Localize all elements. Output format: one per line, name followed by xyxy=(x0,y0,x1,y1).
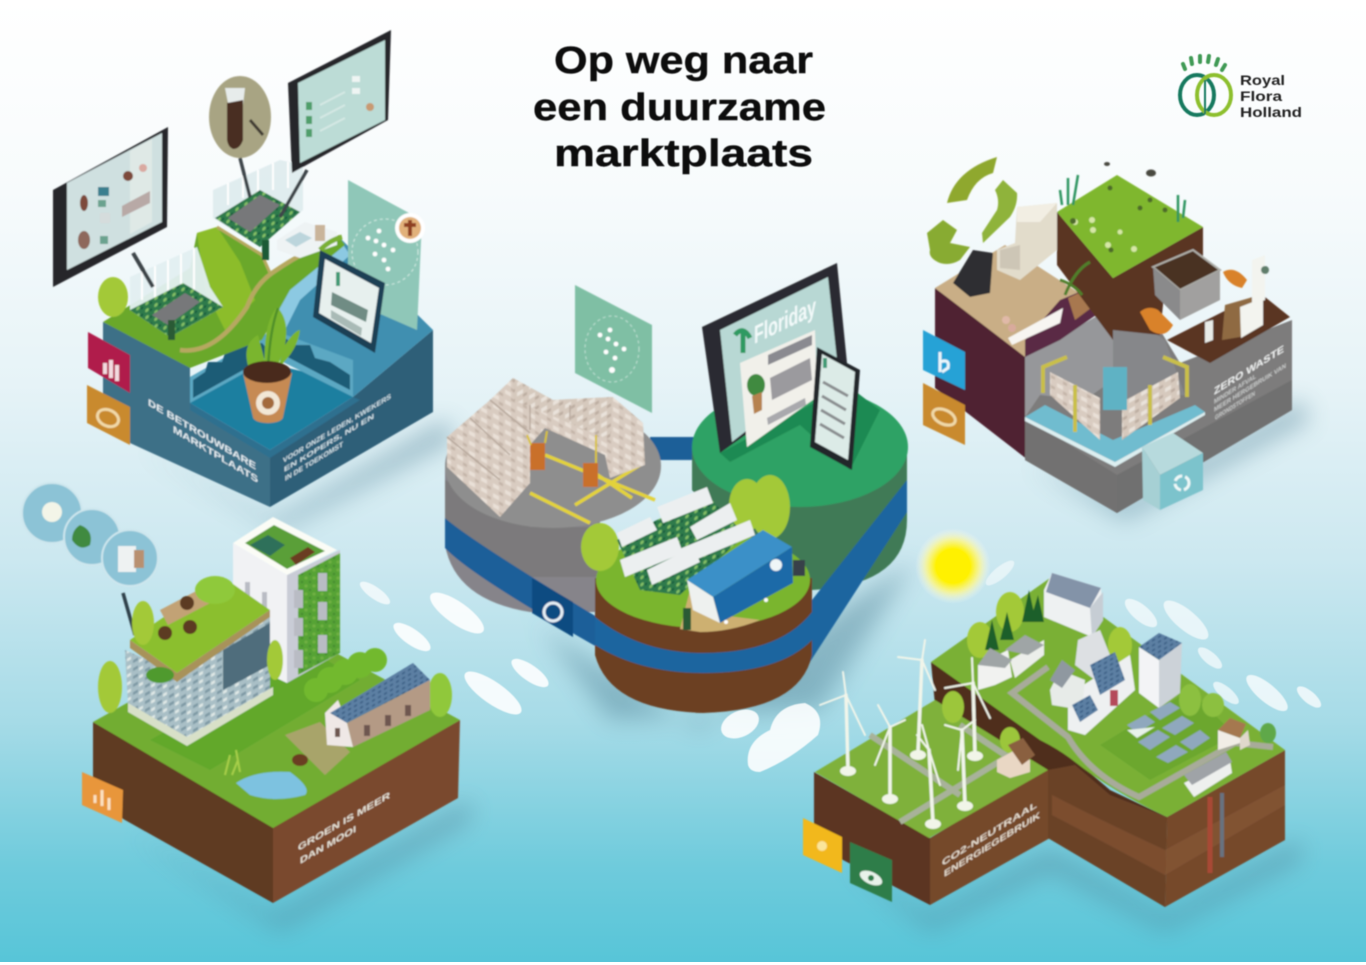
label co2-neutraal energiegebruik: CO2-NEUTRAAL xyxy=(942,800,1037,869)
tree xyxy=(98,277,128,317)
tan top and purple ledge xyxy=(935,245,1125,357)
tree and hedge xyxy=(98,640,452,717)
greenhouses xyxy=(617,487,755,595)
greenhouse back xyxy=(213,160,303,260)
house and pump station xyxy=(1184,718,1250,873)
label right face: VOOR ONZE LEDEN, KWEKERS xyxy=(283,392,391,465)
magnifier soil sample xyxy=(209,76,271,197)
logo: Royal Flora Holland: Royal xyxy=(1240,72,1285,88)
SDG badge red xyxy=(88,332,130,393)
brown floor and chairs xyxy=(1140,255,1290,363)
soft block shadows xyxy=(125,400,1310,930)
label co2-neutraal energiegebruik xyxy=(942,800,1040,880)
logo: Royal Flora Holland: Flora xyxy=(1240,88,1282,104)
label left face xyxy=(148,398,258,486)
tablet Floriday xyxy=(702,263,847,453)
sun xyxy=(915,528,991,604)
ground block xyxy=(93,620,460,903)
label right face: EN KOPERS, NU EN xyxy=(284,412,374,474)
blue band left xyxy=(445,518,597,647)
bees xyxy=(1104,162,1156,176)
bubbles xyxy=(22,483,158,635)
room: water surface and cut-out xyxy=(190,238,433,458)
houses row xyxy=(978,635,1044,690)
label groen is meer dan mooi: DAN MOOI xyxy=(300,824,356,867)
blue connector back xyxy=(650,437,700,460)
solar field xyxy=(1127,702,1210,763)
label zero waste xyxy=(1214,343,1286,422)
plant pot xyxy=(243,307,300,423)
SDG badge green xyxy=(850,842,892,902)
label co2-neutraal energiegebruik: ENERGIEGEBRUIK xyxy=(944,810,1040,880)
SDG badge orange xyxy=(87,385,130,445)
label groen is meer dan mooi xyxy=(298,790,390,867)
tablet on water xyxy=(313,250,385,353)
label left face: DE BETROUWBARE xyxy=(148,398,256,473)
label right face: IN DE TOEKOMST xyxy=(285,440,343,483)
logo: Royal Flora Holland: Holland xyxy=(1240,104,1302,120)
lower plateau xyxy=(815,700,1048,838)
greenhouse left xyxy=(130,247,223,340)
recycling arrows xyxy=(927,157,1017,264)
title: marktplaats xyxy=(554,133,813,175)
white transport van xyxy=(277,222,342,258)
tablet small xyxy=(810,347,860,470)
panel: groen is meer dan mooi xyxy=(22,483,460,903)
label zero waste: GRONDSTOFFEN xyxy=(1215,390,1255,422)
roof garden building xyxy=(125,576,273,746)
SDG badge yellow xyxy=(803,818,842,873)
trees xyxy=(581,475,790,571)
apartment cluster xyxy=(1050,630,1135,735)
water basin with boxes xyxy=(1025,357,1205,467)
ground faces xyxy=(814,662,1285,907)
farm house xyxy=(997,738,1035,778)
sign: certificate board xyxy=(348,180,425,330)
sign: green certificate xyxy=(575,285,652,413)
block sides xyxy=(103,322,433,507)
label zero waste: MEER HERGEBRUIK VAN xyxy=(1214,362,1286,414)
crate black xyxy=(953,250,993,297)
forklifts xyxy=(527,431,598,487)
tablet left xyxy=(53,127,168,287)
grey cylinder xyxy=(445,404,661,612)
logo: Royal Flora Holland xyxy=(1180,56,1302,120)
SDG badge blue xyxy=(923,330,965,390)
SDG badge orange xyxy=(82,772,123,823)
warehouse floor lines xyxy=(530,455,655,523)
green land with path xyxy=(103,227,345,368)
paper cone and pot xyxy=(1002,262,1090,345)
truck xyxy=(683,530,805,630)
tablet Floriday: Floriday xyxy=(754,291,816,350)
SDG badge dark blue xyxy=(532,578,573,637)
panel: central marketplace cylinders xyxy=(445,263,908,713)
wind turbines xyxy=(820,640,990,829)
upper plateau xyxy=(931,578,1285,817)
green cylinder xyxy=(692,385,908,591)
title xyxy=(533,40,826,175)
trees xyxy=(942,590,1276,753)
tall building back xyxy=(1044,573,1103,637)
block lower faces xyxy=(935,288,1292,513)
tablet right xyxy=(280,30,391,217)
panel: de betrouwbare marktplaats xyxy=(53,30,433,507)
label zero waste: MINDER AFVAL xyxy=(1214,372,1257,406)
brown cylinder xyxy=(595,532,812,713)
tower xyxy=(233,517,340,683)
label groen is meer dan mooi: GROEN IS MEER xyxy=(298,790,390,854)
tower right xyxy=(1139,633,1182,708)
label zero waste: ZERO WASTE xyxy=(1214,343,1284,398)
SDG badge orange xyxy=(923,383,965,445)
blue band to right xyxy=(760,480,907,665)
label left face: MARKTPLAATS xyxy=(173,425,258,486)
compost box xyxy=(1153,250,1220,320)
flower box stacks xyxy=(447,378,645,517)
panel: zero waste xyxy=(923,157,1292,513)
stacked boxes white xyxy=(997,203,1057,280)
title: een duurzame xyxy=(533,87,826,129)
pond xyxy=(225,750,308,799)
solar house xyxy=(285,663,430,775)
panel: co2-neutraal energiegebruik xyxy=(803,573,1285,907)
recycling container xyxy=(1142,433,1203,510)
green roof block xyxy=(1057,175,1203,340)
clouds xyxy=(357,557,1324,772)
title: Op weg naar xyxy=(554,40,813,82)
